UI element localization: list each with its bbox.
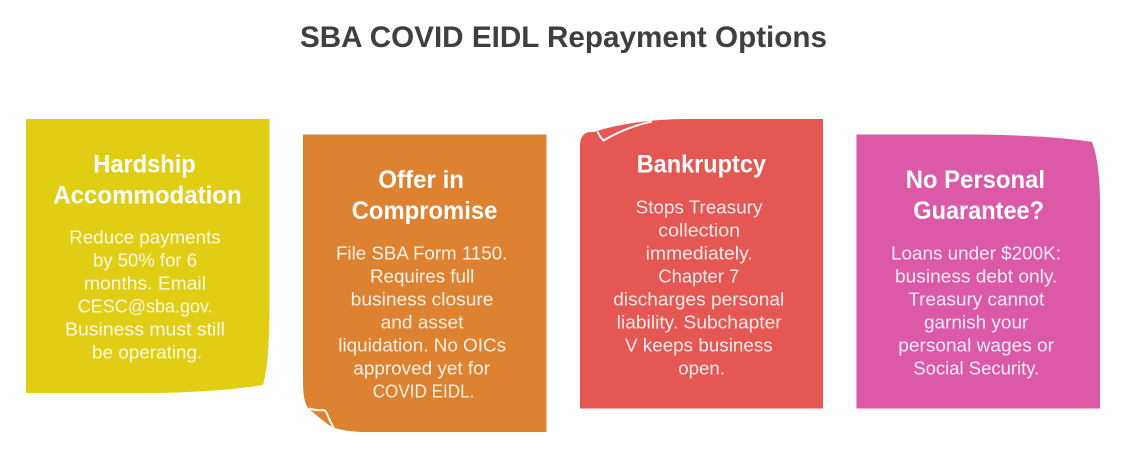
heading: hardship accommodation: Accommodation [53, 182, 242, 210]
text: bankruptcy details [613, 198, 784, 378]
text: guarantee details: garnish your [924, 312, 1028, 332]
text: offer details: business closure [351, 290, 493, 310]
heading: offer in compromise [352, 166, 497, 225]
heading: offer in compromise: Compromise [352, 197, 497, 225]
text: guarantee details: Social Security. [913, 358, 1039, 378]
text: guarantee details: Loans under $200K: [891, 244, 1061, 264]
text: bankruptcy details: collection [658, 220, 740, 240]
icon: folded corner [309, 408, 334, 428]
text: offer details: liquidation. No OICs [338, 336, 506, 356]
text: bankruptcy details: Chapter 7 [658, 266, 739, 286]
title: SBA COVID EIDL Repayment Options [300, 21, 827, 54]
text: bankruptcy details: Stops Treasury [636, 198, 762, 218]
text: offer details: Requires full [370, 266, 474, 286]
text: hardship details: months. Email [84, 274, 206, 294]
text: hardship details: CESC@sba.gov. [78, 296, 213, 316]
text: hardship details: by 50% for 6 [93, 250, 197, 270]
heading: no personal guarantee: Guarantee? [913, 197, 1044, 225]
text: offer details: and asset [381, 312, 463, 332]
text: offer details: COVID EIDL. [373, 382, 474, 402]
icon: folded corner [598, 122, 652, 140]
heading: hardship accommodation [53, 150, 242, 210]
text: offer details: approved yet for [353, 358, 490, 378]
text: bankruptcy details: open. [678, 358, 725, 378]
text: hardship details: Business must still [65, 320, 225, 340]
panel: bankruptcy [580, 119, 823, 408]
panel: hardship accommodation [26, 119, 270, 393]
panel: offer in compromise [303, 134, 546, 432]
text: guarantee details: personal wages or [898, 336, 1054, 356]
heading: hardship accommodation: Hardship [93, 150, 196, 178]
text: offer details [336, 244, 507, 402]
text: guarantee details [891, 244, 1061, 378]
heading: no personal guarantee: No Personal [906, 166, 1045, 194]
text: guarantee details: business debt only. [895, 266, 1057, 286]
text: bankruptcy details: V keeps business [625, 336, 773, 356]
panel: no personal guarantee [856, 134, 1100, 408]
heading: bankruptcy: Bankruptcy [637, 150, 766, 178]
text: guarantee details: Treasury cannot [908, 290, 1044, 310]
heading: offer in compromise: Offer in [378, 166, 464, 194]
text: offer details: File SBA Form 1150. [336, 244, 507, 264]
text: bankruptcy details: immediately. [646, 244, 753, 264]
heading: no personal guarantee [906, 166, 1045, 225]
text: bankruptcy details: discharges personal [613, 290, 784, 310]
text: bankruptcy details: liability. Subchapter [617, 312, 782, 332]
text: hardship details: Reduce payments [69, 228, 221, 248]
text: hardship details: be operating. [92, 342, 202, 362]
text: hardship details [65, 228, 225, 362]
